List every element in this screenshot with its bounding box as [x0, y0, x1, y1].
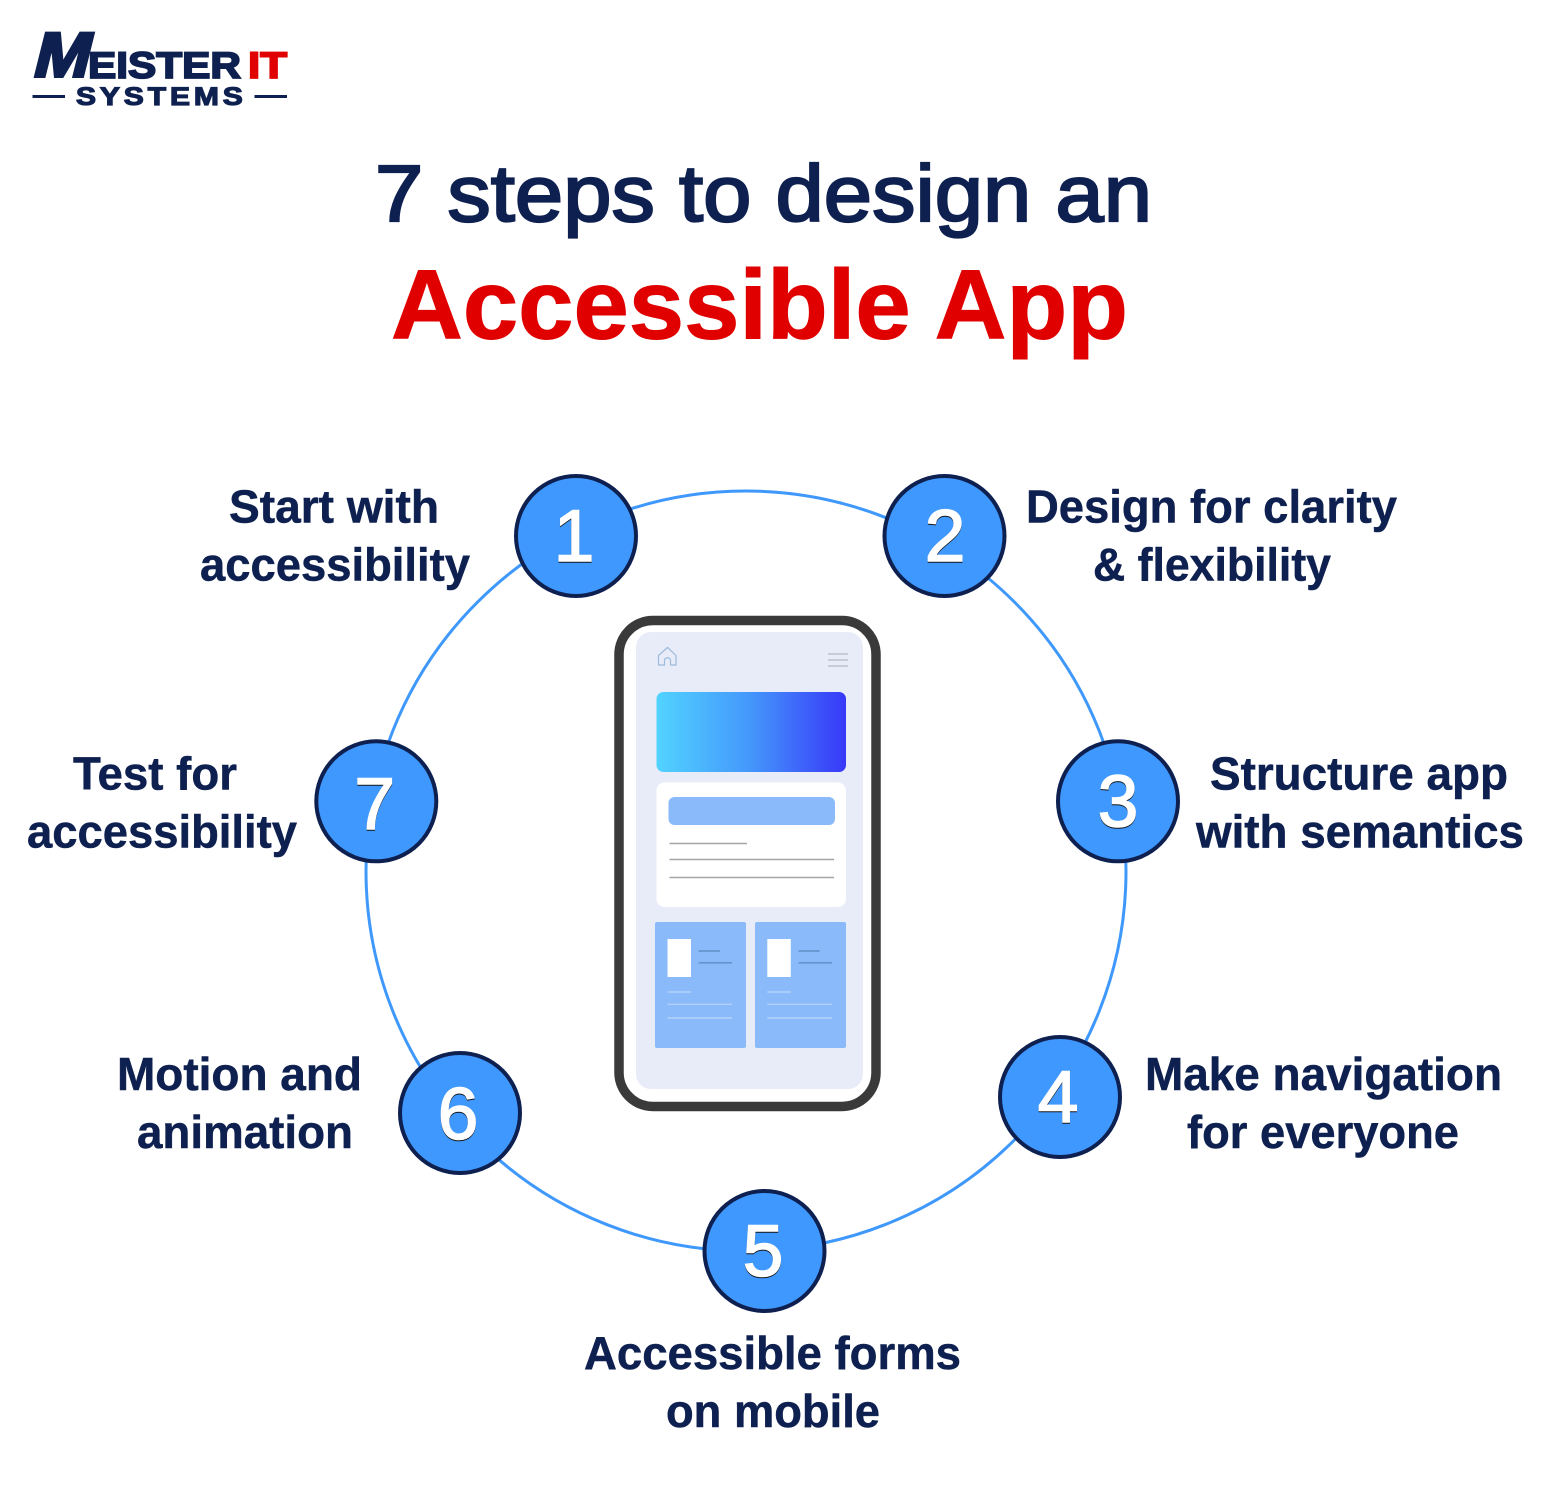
step 2 label: Design for clarity — [1026, 480, 1397, 532]
logo: Meister IT Systems: M — [28, 19, 101, 90]
step 5 badge — [704, 1191, 824, 1311]
left blue card — [655, 922, 746, 1048]
step 5 label: on mobile — [666, 1385, 880, 1437]
step 6 label: animation — [137, 1106, 353, 1158]
logo: Meister IT Systems: SYSTEMS — [76, 82, 243, 110]
phone illustration — [619, 620, 876, 1106]
gradient banner — [656, 692, 846, 772]
step 2 label: & flexibility — [1093, 538, 1331, 590]
step 6 badge: 6 — [438, 1075, 478, 1156]
step 2 label — [1026, 480, 1397, 590]
step 1 badge: 1 — [554, 497, 594, 578]
step 4 badge: 4 — [1038, 1058, 1078, 1139]
step 7 label: Test for — [73, 748, 237, 800]
step 7 label: accessibility — [27, 806, 297, 858]
step 2 badge: 2 — [925, 496, 965, 577]
step 2 badge: 2 — [925, 497, 965, 578]
step 7 label — [27, 748, 297, 858]
step 3 label: with semantics — [1195, 806, 1524, 858]
step 3 badge: 3 — [1098, 762, 1138, 844]
step 4 badge: 4 — [1038, 1057, 1078, 1138]
icon: menu — [828, 654, 848, 666]
ring connecting the steps — [366, 491, 1126, 1251]
step 5 label: Accessible forms — [584, 1327, 961, 1379]
step 7 badge: 7 — [354, 765, 395, 846]
step 2 badge — [884, 476, 1004, 596]
step 6 badge — [400, 1053, 520, 1173]
step 5 badge: 5 — [743, 1211, 783, 1292]
step 7 badge: 7 — [354, 764, 395, 845]
step 4 label — [1145, 1048, 1502, 1158]
step 4 badge — [1000, 1037, 1120, 1157]
step 1 label: Start with — [229, 480, 439, 532]
white content card — [656, 782, 846, 907]
title: Accessible App — [391, 250, 1128, 360]
step 6 label: Motion and — [117, 1048, 362, 1100]
step 6 badge: 6 — [438, 1074, 478, 1155]
step 7 badge — [316, 741, 436, 861]
step 3 label — [1195, 748, 1524, 858]
step 1 label — [200, 480, 470, 590]
step 1 badge: 1 — [554, 496, 594, 577]
step 1 badge — [516, 476, 636, 596]
logo: Meister IT Systems — [28, 19, 287, 110]
step 3 badge — [1058, 741, 1178, 861]
step 1 label: accessibility — [200, 538, 470, 590]
step 3 label: Structure app — [1210, 748, 1508, 800]
step 3 badge: 3 — [1098, 762, 1138, 842]
step 4 label: for everyone — [1187, 1106, 1459, 1158]
title — [375, 149, 1152, 360]
title: 7 steps to design an — [375, 149, 1152, 238]
logo: Meister IT Systems: EISTER — [88, 44, 241, 86]
step 6 label — [117, 1048, 362, 1158]
step 4 label: Make navigation — [1145, 1048, 1502, 1100]
phone screen — [636, 632, 863, 1089]
icon: home — [658, 648, 676, 665]
step 5 badge: 5 — [743, 1212, 783, 1293]
logo: Meister IT Systems: IT — [248, 44, 287, 86]
right blue card — [755, 922, 846, 1048]
step 5 label — [584, 1327, 961, 1437]
